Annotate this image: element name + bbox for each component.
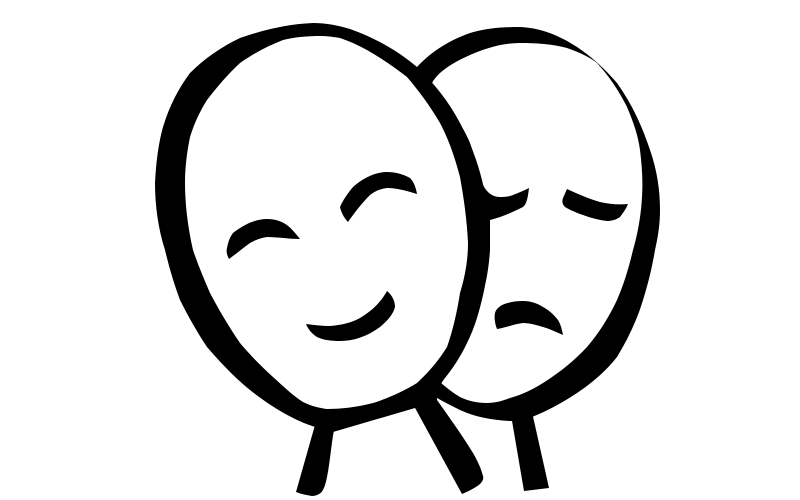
tragedy mask stick <box>511 412 549 491</box>
comedy left eye <box>227 219 300 259</box>
comedy mask outline <box>155 23 489 432</box>
icon: comedy mask (front) <box>155 23 489 496</box>
comedy mask left stick <box>296 425 334 496</box>
tragedy right eye <box>562 189 628 221</box>
comedy mask face <box>185 36 468 409</box>
tragedy mask outline <box>417 27 660 421</box>
icon: tragedy mask (back) <box>417 27 660 491</box>
comedy mask right stick <box>414 398 483 494</box>
tragedy mask face <box>432 43 642 403</box>
comedy mouth <box>306 291 395 341</box>
comedy right eye <box>340 172 417 222</box>
tragedy mouth <box>495 301 563 335</box>
